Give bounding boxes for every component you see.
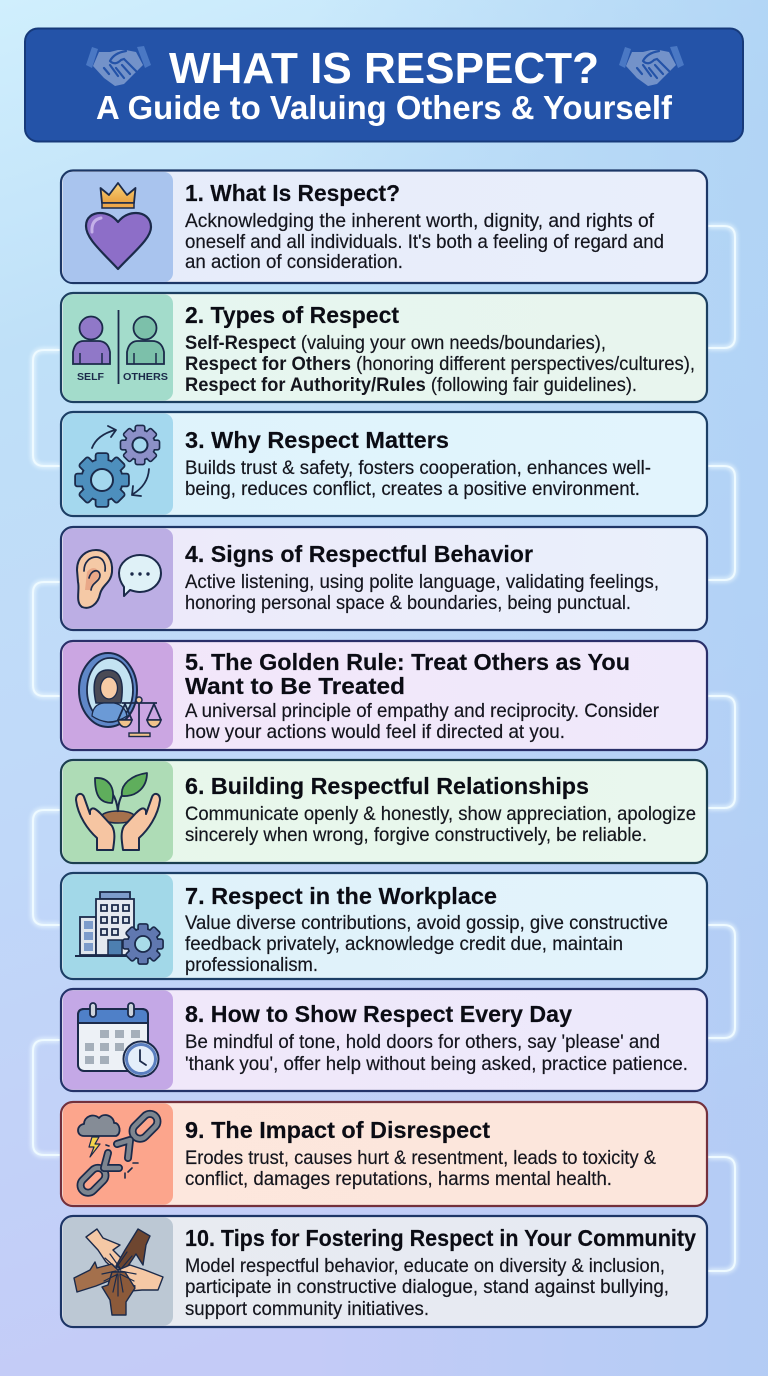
body text: participate in constructive dialogue, stand against bullying, bbox=[185, 1276, 669, 1298]
body text: support community initiatives. bbox=[185, 1298, 429, 1320]
body text bbox=[185, 1255, 669, 1320]
panel: 4 Signs of Respectful Behavior bbox=[61, 527, 707, 630]
body text: Model respectful behavior, educate on diversity & inclusion, bbox=[185, 1255, 665, 1277]
icon: self and others bbox=[73, 310, 168, 384]
icon: handshake right bbox=[619, 46, 684, 86]
heading: 8. How to Show Respect Every Day bbox=[185, 1001, 572, 1027]
body text bbox=[185, 803, 696, 846]
icon: mirror and scales bbox=[79, 653, 161, 736]
panel: 1 What Is Respect bbox=[61, 170, 707, 283]
body text: A universal principle of empathy and reciprocity. Consider bbox=[185, 700, 659, 722]
body text: honoring personal space & boundaries, being punctual. bbox=[185, 592, 631, 614]
body text: sincerely when wrong, forgive constructively, be reliable. bbox=[185, 824, 647, 846]
body text: Self-Respect (valuing your own needs/boundaries), bbox=[185, 332, 606, 354]
body text: Respect for Authority/Rules (following fair guidelines). bbox=[185, 374, 637, 396]
heading: 9. The Impact of Disrespect bbox=[185, 1117, 490, 1143]
icon: ear and speech bubble bbox=[77, 550, 161, 608]
body text: Communicate openly & honestly, show appreciation, apologize bbox=[185, 803, 696, 825]
icon: calendar and clock bbox=[78, 1003, 158, 1076]
heading: 10. Tips for Fostering Respect in Your Community bbox=[185, 1225, 696, 1251]
body text bbox=[185, 457, 651, 500]
body text: Be mindful of tone, hold doors for others, say 'please' and bbox=[185, 1031, 660, 1053]
heading: 3. Why Respect Matters bbox=[185, 427, 449, 453]
panel: 9 The Impact of Disrespect bbox=[61, 1102, 707, 1206]
body text bbox=[185, 332, 695, 396]
body text: Erodes trust, causes hurt & resentment, leads to toxicity & bbox=[185, 1147, 656, 1169]
icon: self and others: SELF bbox=[77, 371, 105, 383]
body text bbox=[185, 912, 668, 976]
heading: 6. Building Respectful Relationships bbox=[185, 773, 589, 799]
panel: 5 The Golden Rule bbox=[61, 641, 707, 750]
panel: 10 Tips for Fostering Respect bbox=[61, 1216, 707, 1327]
icon: crown and heart bbox=[86, 183, 151, 269]
body text: Builds trust & safety, fosters cooperation, enhances well- bbox=[185, 457, 651, 479]
header banner bbox=[25, 28, 743, 142]
body text: being, reduces conflict, creates a positive environment. bbox=[185, 478, 640, 500]
body text bbox=[185, 1031, 688, 1075]
connector lines bbox=[33, 226, 735, 1271]
icon: storm and broken chain bbox=[77, 1111, 161, 1196]
icon: self and others: OTHERS bbox=[123, 371, 168, 383]
icon: stacked hands bbox=[74, 1229, 163, 1315]
body text: Acknowledging the inherent worth, dignity, and rights of bbox=[185, 210, 655, 232]
icon: gears bbox=[76, 426, 159, 506]
subtitle: A Guide to Valuing Others & Yourself bbox=[96, 89, 673, 126]
icon: office building and gear bbox=[75, 892, 162, 963]
panel: 7 Respect in the Workplace bbox=[61, 873, 707, 979]
body text: an action of consideration. bbox=[185, 251, 403, 273]
heading: 1. What Is Respect? bbox=[185, 180, 400, 206]
heading: 2. Types of Respect bbox=[185, 302, 399, 328]
heading: Want to Be Treated bbox=[185, 673, 405, 699]
heading bbox=[185, 649, 630, 699]
body text bbox=[185, 1147, 656, 1190]
body text: oneself and all individuals. It's both a feeling of regard and bbox=[185, 231, 664, 253]
icon: handshake left bbox=[86, 46, 151, 86]
panel: 3 Why Respect Matters bbox=[61, 412, 707, 516]
panel: 6 Building Respectful Relationships bbox=[61, 760, 707, 863]
heading: 4. Signs of Respectful Behavior bbox=[185, 541, 533, 567]
icon: hands holding plant bbox=[76, 773, 160, 850]
body text bbox=[185, 210, 664, 273]
panel: 2 Types of Respect bbox=[61, 293, 707, 402]
body text: 'thank you', offer help without being asked, practice patience. bbox=[185, 1053, 688, 1075]
body text: Value diverse contributions, avoid gossip, give constructive bbox=[185, 912, 668, 934]
body text: professionalism. bbox=[185, 954, 318, 976]
body text: conflict, damages reputations, harms mental health. bbox=[185, 1168, 612, 1190]
body text: feedback privately, acknowledge credit due, maintain bbox=[185, 933, 623, 955]
body text bbox=[185, 571, 659, 614]
body text: Active listening, using polite language, validating feelings, bbox=[185, 571, 659, 593]
body text: how your actions would feel if directed at you. bbox=[185, 721, 565, 743]
body text bbox=[185, 700, 659, 743]
panel: 8 How to Show Respect Every Day bbox=[61, 989, 707, 1091]
heading: 7. Respect in the Workplace bbox=[185, 883, 497, 909]
heading: 5. The Golden Rule: Treat Others as You bbox=[185, 649, 630, 675]
body text: Respect for Others (honoring different perspectives/cultures), bbox=[185, 353, 695, 375]
title: WHAT IS RESPECT? bbox=[169, 44, 599, 93]
